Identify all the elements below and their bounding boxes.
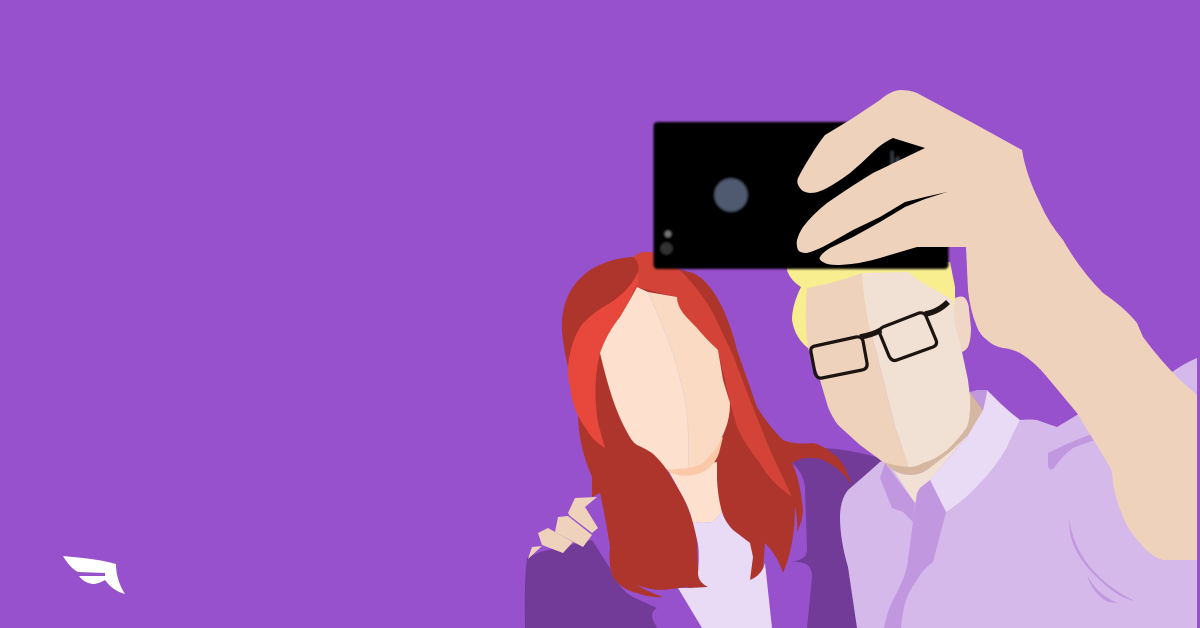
man's face, right half bbox=[862, 272, 970, 467]
glasses bridge bbox=[860, 330, 881, 337]
woman's back hair bbox=[562, 257, 852, 597]
phone flash bbox=[665, 231, 671, 237]
woman's bright-red hair strand bbox=[568, 270, 638, 448]
shirt wrinkles bbox=[1069, 517, 1135, 603]
left lens bbox=[811, 337, 867, 378]
man's neck shadow bbox=[883, 392, 983, 475]
phone bbox=[654, 122, 948, 269]
woman's face, left half bbox=[600, 287, 689, 470]
man's blond hair bbox=[787, 262, 955, 348]
phone reflection bbox=[891, 151, 899, 165]
woman's hand bbox=[528, 497, 598, 559]
man's ear bbox=[952, 296, 971, 352]
logo: white wing bbox=[63, 556, 125, 594]
man bbox=[787, 262, 1197, 628]
shirt sleeve shading bbox=[1048, 434, 1095, 470]
woman bbox=[525, 252, 900, 628]
woman's top bbox=[678, 512, 772, 628]
woman's chin shadow bbox=[667, 437, 723, 476]
man's shirt bbox=[840, 358, 1197, 628]
right lens bbox=[880, 313, 937, 360]
man's glasses bbox=[811, 302, 948, 378]
phone secondary lens bbox=[660, 242, 672, 254]
man's arm and hand bbox=[797, 90, 1197, 560]
woman's dark fringe bbox=[562, 257, 638, 353]
shirt collar, left bbox=[880, 463, 915, 522]
woman's neck bbox=[668, 462, 722, 523]
woman's left sleeve bbox=[525, 540, 657, 628]
shirt placket bbox=[884, 480, 946, 628]
shirt collar, inner bbox=[970, 390, 987, 410]
man's face, left half bbox=[806, 273, 909, 467]
woman's mid-red hair bbox=[633, 252, 792, 497]
phone body bbox=[654, 122, 948, 269]
woman's face, right half bbox=[648, 292, 730, 468]
phone lens bbox=[714, 178, 748, 212]
man's neck bbox=[893, 435, 968, 503]
glasses temple bbox=[925, 302, 948, 314]
shirt collar, right bbox=[930, 390, 1020, 512]
woman's right sleeve bbox=[790, 448, 900, 628]
